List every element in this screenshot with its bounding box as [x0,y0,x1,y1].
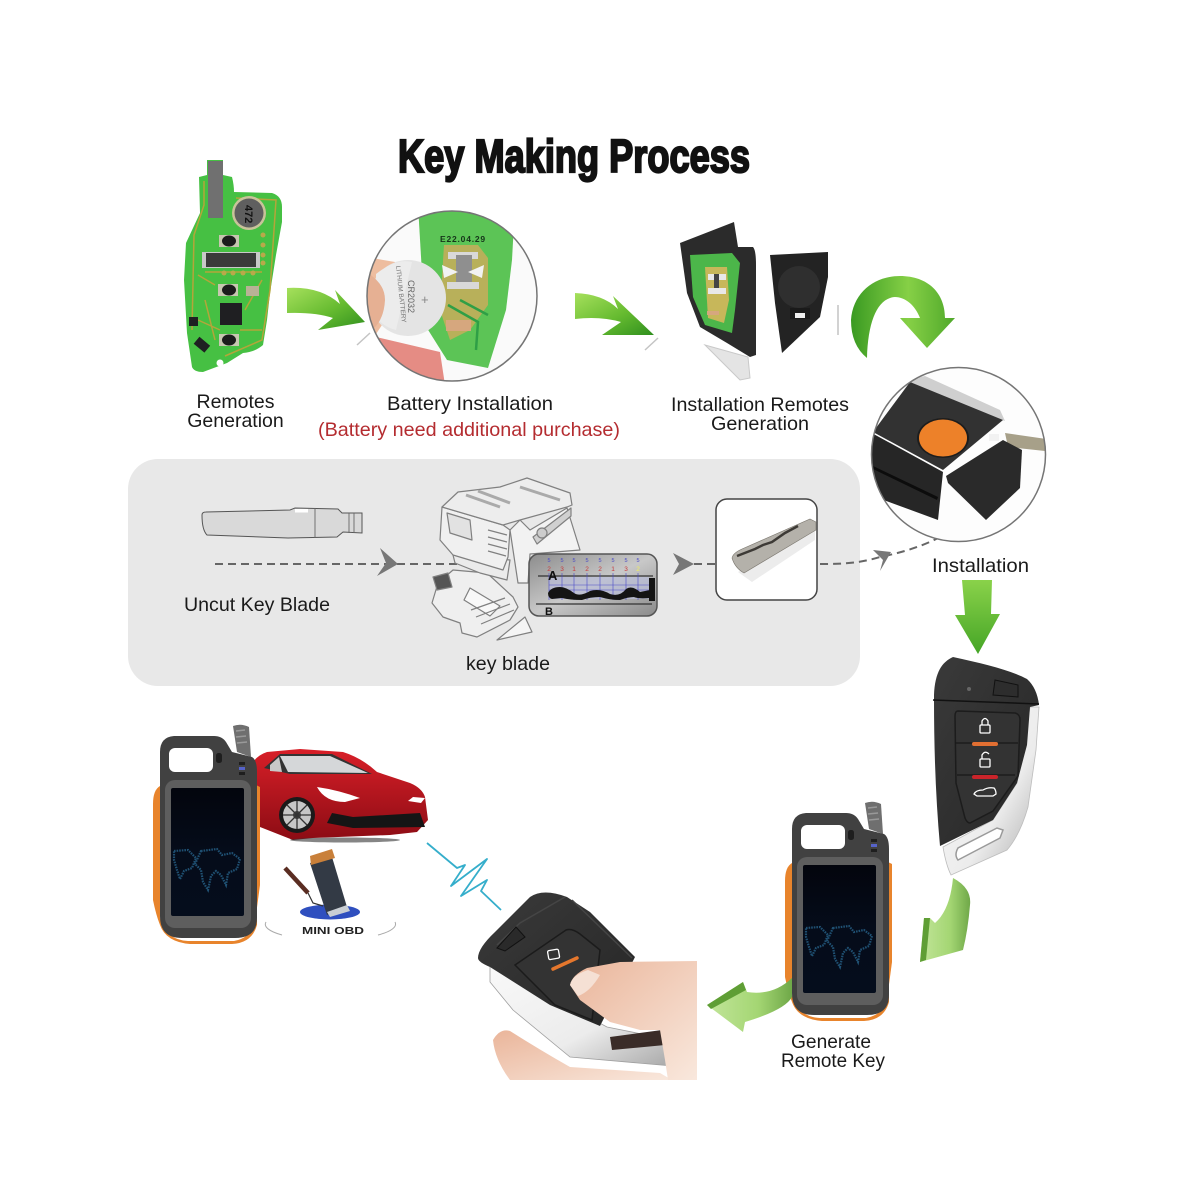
title: Key Making Process [398,130,750,182]
inset: key cut depth chart: 3 [560,566,564,573]
inset: key cut depth chart: 2 [547,566,551,573]
icon: red sports car [253,749,428,842]
generate remote key label: Remote Key [781,1050,885,1072]
installation remotes generation label [671,394,849,435]
icon: cut key blade box [716,499,817,600]
icon: signal pulse [427,843,501,910]
generate remote key label: Generate [791,1031,871,1053]
arrow: board to battery [287,288,365,330]
arrow: curved down to installation [851,276,955,358]
installation remotes generation label: Installation Remotes [671,394,849,416]
inset: key cut depth chart: 5 [585,558,589,564]
installation label: Installation [932,555,1029,577]
arrow: battery to assembly [575,293,654,335]
icon: battery installation circle [358,205,537,385]
icon: battery installation circle: CR2032 [406,280,416,313]
inset: key cut depth chart: 5 [611,558,615,564]
arrow: remote down to programmer [920,878,970,962]
key blade label: key blade [466,653,550,675]
icon: finished smart key fob [933,657,1039,875]
inset: key cut depth chart: 1 [572,566,576,573]
inset: key cut depth chart [529,554,657,618]
battery note in red: (Battery need additional purchase) [318,419,620,441]
arrow: to cutter [377,548,398,576]
icon: key programmer with car [153,725,260,944]
dashed cut path [215,537,940,564]
icon: mini OBD adapter [265,849,396,937]
small reflection marks [357,305,838,350]
battery installation label: Battery Installation [387,393,553,415]
uncut key blade label: Uncut Key Blade [184,594,330,616]
generate remote key label [781,1031,885,1072]
icon: remote circuit board [184,160,282,372]
installation remotes generation label: Generation [711,413,809,435]
inset: key cut depth chart: 5 [547,558,551,564]
icon: installing key blade circle [870,368,1046,542]
inset: key cut depth chart: 3 [624,566,628,573]
icon: uncut key blade [202,508,362,538]
remotes generation label: Generation [187,410,284,432]
icon: remote held in hand [478,892,697,1080]
inset: key cut depth chart: 5 [636,558,640,564]
icon: mini OBD adapter: MINI OBD [302,926,364,937]
icon: remote circuit board: 472 [242,205,254,223]
icon: opened remote shell [680,222,828,380]
icon: battery installation circle: + [421,292,429,307]
inset: key cut depth chart: B [545,606,553,618]
icon: key programmer, generate remote [785,802,892,1021]
icon: battery installation circle: E22.04.29 [440,234,486,244]
icon: battery installation circle: LITHIUM BATTERY [394,265,407,324]
inset: key cut depth chart: 1 [611,566,615,573]
inset: key cut depth chart: A [548,568,558,583]
inset: key cut depth chart: 2 [585,566,589,573]
inset: key cut depth chart: 5 [598,558,602,564]
inset: key cut depth chart: 2 [636,566,640,573]
arrow: down to finished remote [955,580,1000,654]
inset: key cut depth chart: 2 [598,566,602,573]
inset: key cut depth chart: 5 [572,558,576,564]
inset: key cut depth chart: 5 [560,558,564,564]
arrow: to cut key [673,553,694,575]
remotes generation label: Remotes [196,391,275,413]
arrow: blade into remote [873,550,891,571]
panel: key blade cutting [128,459,940,686]
icon: key cutting machine [432,478,580,640]
arrow: programmer to hand remote [707,978,792,1032]
inset: key cut depth chart: 5 [624,558,628,564]
